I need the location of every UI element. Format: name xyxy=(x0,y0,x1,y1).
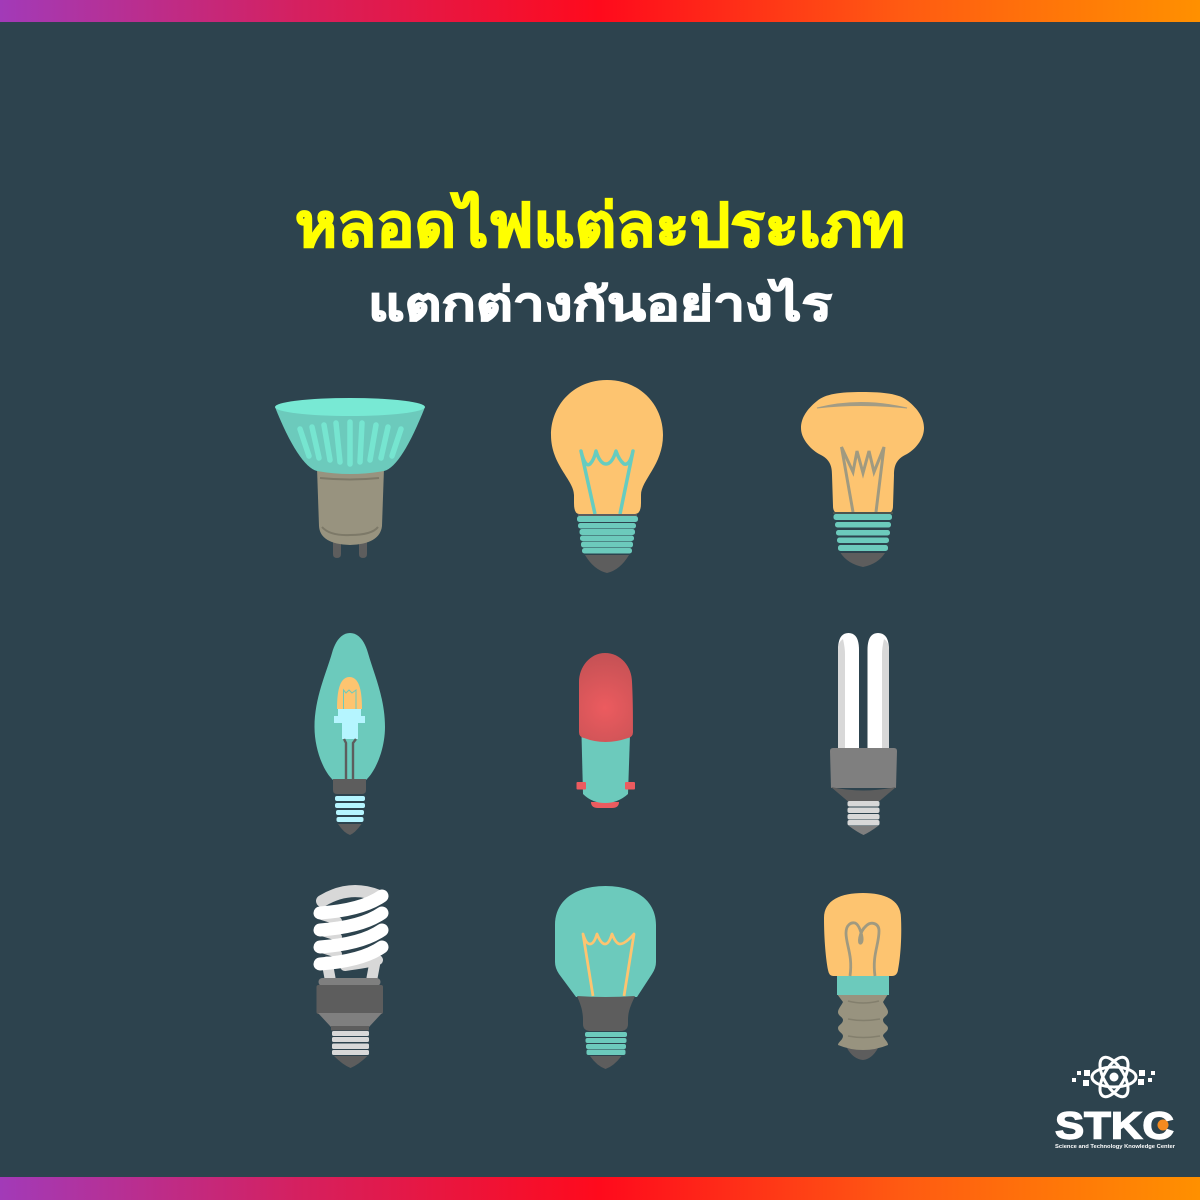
logo tagline: Science and Technology Knowledge Center xyxy=(1055,1144,1176,1150)
title xyxy=(295,190,905,330)
bulb: candle xyxy=(314,633,385,835)
logo atom icon xyxy=(1072,1053,1155,1101)
bottom gradient bar xyxy=(0,1177,1200,1200)
logo: STKC xyxy=(1055,1053,1176,1150)
bulb: classic incandescent xyxy=(551,380,663,573)
title: หลอดไฟแต่ละประเภท xyxy=(295,190,905,259)
bulb: compact fluorescent tube xyxy=(830,633,897,835)
bulb: reflector spotlight xyxy=(275,398,425,558)
title: แตกต่างกันอย่างไร xyxy=(368,278,832,330)
logo wordmark: STKC xyxy=(1055,1106,1174,1148)
bulb: small appliance xyxy=(824,893,901,1060)
bulb: teal globe xyxy=(555,886,656,1069)
bulb: spiral CFL xyxy=(316,891,383,1068)
bulb: red indicator xyxy=(576,653,635,808)
top gradient bar xyxy=(0,0,1200,22)
bulb: mushroom reflector xyxy=(801,392,924,567)
